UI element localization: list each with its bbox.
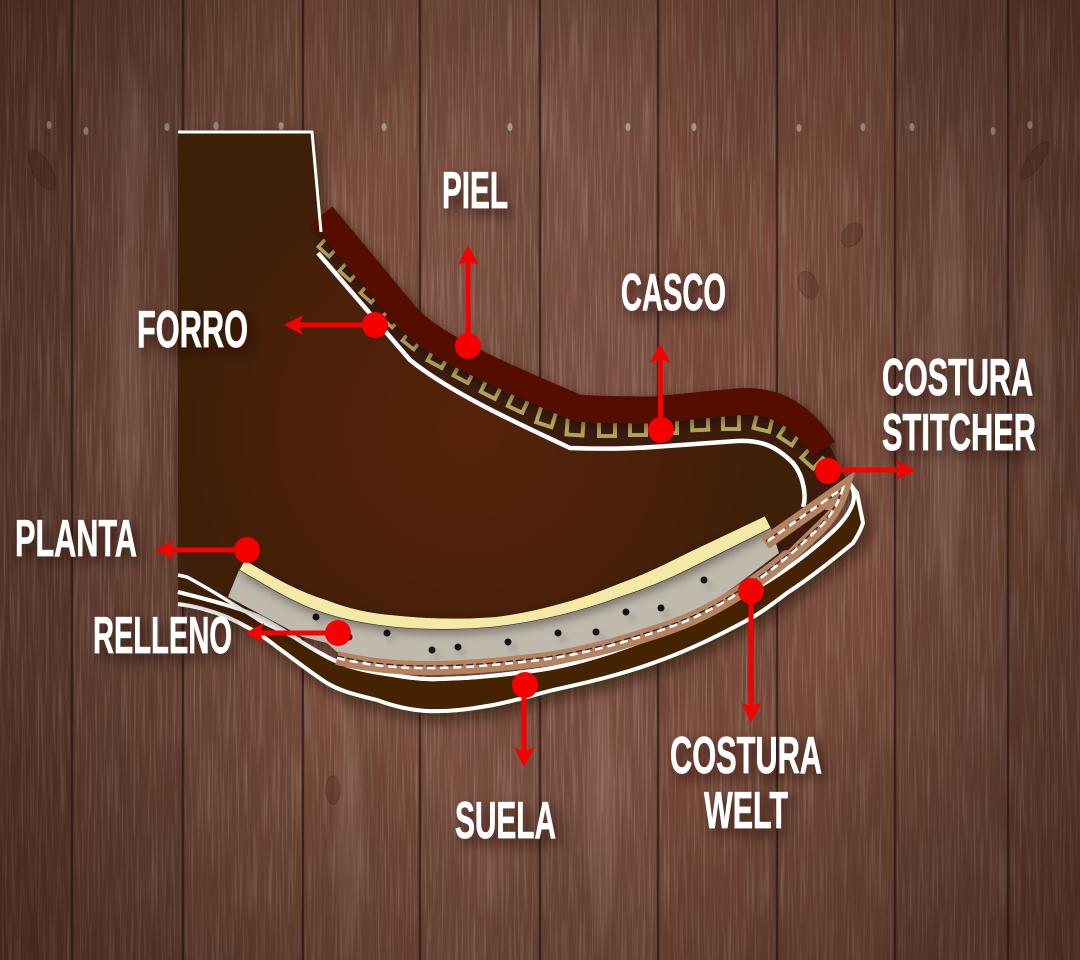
wedge gap between welt branches <box>780 510 829 551</box>
upper lining area <box>178 132 805 645</box>
white collar outline <box>178 132 321 232</box>
arrow: forro <box>284 312 388 338</box>
arrow: costura stitcher <box>815 458 916 484</box>
arrow: relleno <box>245 620 351 646</box>
filler soft shading <box>316 582 713 659</box>
label: COSTURA STITCHER <box>882 349 1036 462</box>
sole upper white outline <box>178 480 854 679</box>
label: PIEL: PIEL <box>442 162 508 220</box>
boot cross-section diagram <box>178 132 863 711</box>
label: COSTURA WELT: WELT <box>704 782 788 840</box>
plantilla cream insole <box>239 516 771 629</box>
sole <box>178 480 863 711</box>
arrow: planta <box>155 537 260 563</box>
piel upper leather band <box>322 215 824 449</box>
casco square stitches <box>316 235 825 471</box>
arrow: suela <box>512 672 538 767</box>
arrow: piel <box>455 245 481 359</box>
label: COSTURA WELT: COSTURA <box>670 727 822 785</box>
white lining outline <box>318 253 805 507</box>
label: SUELA: SUELA <box>455 792 556 850</box>
label: COSTURA WELT <box>670 727 822 840</box>
boot casing base <box>178 132 847 645</box>
arrow: casco <box>648 344 674 443</box>
label: CASCO: CASCO <box>621 264 726 322</box>
label: FORRO: FORRO <box>137 301 248 359</box>
arrow: costura welt <box>738 578 764 722</box>
thin midsole outline <box>178 575 300 640</box>
filler dots <box>312 576 708 654</box>
label: RELLENO: RELLENO <box>93 607 232 665</box>
relleno grey filler <box>228 528 779 662</box>
welt strip with stitching <box>337 488 843 668</box>
label: PLANTA: PLANTA <box>15 510 137 568</box>
